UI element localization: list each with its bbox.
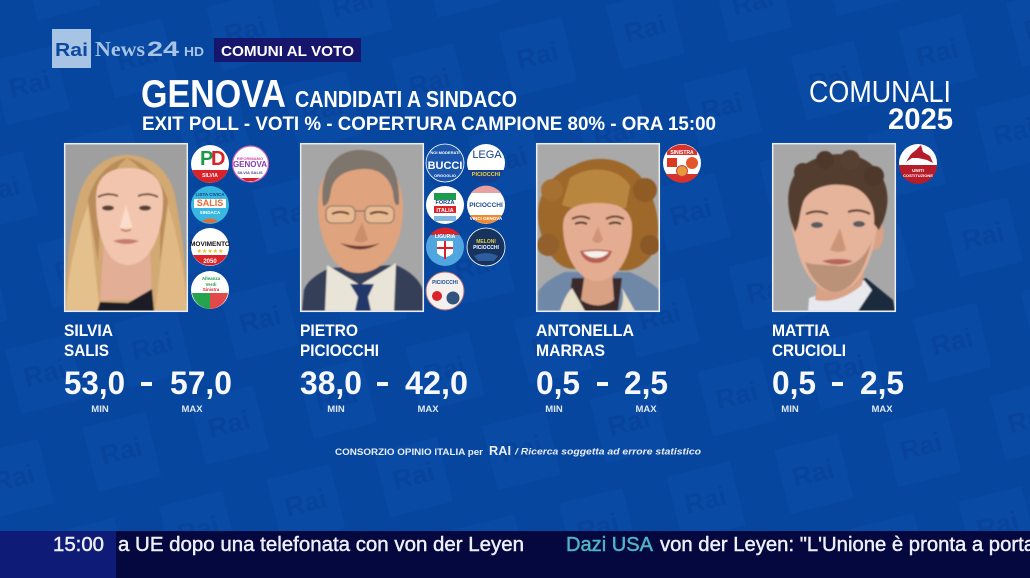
- logo: Sinistra Alternativa: [663, 144, 701, 183]
- logo: Movimento 5 Stelle: ★★★★★: [197, 248, 223, 255]
- candidate name: [300, 321, 379, 360]
- candidate name: [64, 321, 113, 360]
- logo: Forza Italia: FORZA: [436, 200, 454, 206]
- candidate name: [772, 321, 846, 360]
- logo: Uniti per la Costituzione: COSTITUZIONE: [903, 173, 933, 178]
- candidate name: MARRAS: [536, 341, 605, 360]
- logo: Rai News 24 HD: 24: [147, 38, 179, 61]
- logo: Uniti per la Costituzione: UNITI: [912, 168, 924, 173]
- logo: Lista civica Salis: [191, 186, 229, 224]
- logo: PD: [191, 145, 229, 183]
- logo: Genova: RIFORMIAMO: [237, 156, 263, 161]
- logo: Sinistra Alternativa: SINISTRA: [670, 150, 694, 156]
- vote range: MAX: [871, 404, 893, 415]
- vote range: [536, 365, 668, 415]
- vote range: 38,0: [300, 365, 362, 401]
- logo: Meloni: MELONI: [476, 239, 496, 245]
- logo: Movimento 5 Stelle: MOVIMENTO: [190, 241, 230, 248]
- logo: Meloni: PICIOCCHI: [473, 245, 500, 251]
- candidate name: [536, 321, 634, 360]
- news ticker: von der Leyen: "L'Unione è pronta a porta: [660, 534, 1030, 556]
- logo: Lista civica Salis: LISTA CIVICA: [196, 192, 225, 197]
- logo: Liguria UDC: LIGURIA: [435, 234, 456, 240]
- party logos: Salis coalition: [190, 145, 268, 309]
- portrait: Silvia Salis: [64, 143, 188, 312]
- news ticker: a UE dopo una telefonata con von der Leyen: [118, 534, 524, 556]
- title: GENOVA: [141, 73, 286, 116]
- news ticker: Dazi USA: [566, 534, 654, 556]
- party logos: Piciocchi coalition: [426, 144, 505, 310]
- vote range: MIN: [781, 404, 799, 415]
- title: [141, 73, 517, 116]
- candidate name: ANTONELLA: [536, 321, 634, 340]
- subtitle: EXIT POLL - VOTI % - COPERTURA CAMPIONE 80% - ORA 15:00: [142, 114, 716, 135]
- vote range: 2,5: [860, 365, 904, 401]
- vote range: MAX: [635, 404, 657, 415]
- election label: Comunali 2025: 2025: [888, 103, 953, 136]
- logo: Meloni: [467, 228, 505, 266]
- vote range: 42,0: [405, 365, 468, 401]
- source note: RAI: [489, 444, 511, 458]
- logo: Forza Italia: [426, 186, 464, 224]
- logo: Lega: LEGA: [472, 149, 502, 161]
- candidate name: MATTIA: [772, 321, 830, 340]
- logo: Verdi Sinistra: Sinistra: [203, 287, 220, 292]
- logo: Bucci: [426, 144, 464, 182]
- logo: PD: P: [200, 148, 213, 170]
- vote range: MIN: [327, 404, 345, 415]
- panel: Pietro Piciocchi: [300, 143, 505, 415]
- vote range: MIN: [545, 404, 563, 415]
- logo: Rai News 24 HD: HD: [184, 45, 204, 59]
- vote range: 57,0: [170, 365, 232, 401]
- candidate name: CRUCIOLI: [772, 341, 846, 360]
- source note: / Ricerca soggetta ad errore statistico: [514, 446, 701, 458]
- candidate name: PIETRO: [300, 321, 358, 340]
- vote range: [300, 365, 468, 415]
- news ticker: 15:00: [53, 534, 104, 556]
- portrait: Pietro Piciocchi: [300, 143, 424, 312]
- vote range: [772, 365, 904, 415]
- section tag: Comuni al voto: [214, 38, 361, 62]
- logo: Genova: [232, 146, 268, 182]
- logo: Verdi Sinistra: Alleanza: [202, 276, 221, 281]
- logo: Verdi Sinistra: Verdi: [205, 282, 217, 287]
- logo: Rai News 24 HD: [52, 29, 204, 68]
- source note: CONSORZIO OPINIO ITALIA per: [335, 447, 483, 458]
- logo: Rai News 24 HD: Rai: [55, 39, 88, 60]
- logo: Uniti per la Costituzione: [899, 144, 937, 184]
- logo: Piciocchi centro: PICIOCCHI: [432, 280, 459, 286]
- panel: Silvia Salis: [64, 143, 268, 415]
- vote range: [64, 365, 232, 415]
- vote range: 53,0: [64, 365, 125, 401]
- logo: Forza Italia: ITALIA: [436, 208, 454, 214]
- election label: Comunali 2025: [809, 74, 953, 136]
- logo: Liguria UDC: [426, 228, 464, 266]
- vote range: MAX: [181, 404, 203, 415]
- source note: [335, 444, 701, 458]
- logo: Genova: GENOVA: [233, 160, 267, 169]
- portrait: Mattia Crucioli: [772, 143, 896, 312]
- vote range: 0,5: [772, 365, 816, 401]
- vote range: MIN: [91, 404, 109, 415]
- candidate name: SALIS: [64, 341, 109, 360]
- logo: PD: D: [211, 148, 225, 170]
- logo: Bucci: NOI MODERATI: [430, 150, 460, 155]
- logo: Movimento 5 Stelle: 2050: [203, 259, 217, 265]
- logo: Genova: SILVIA SALIS: [237, 170, 263, 175]
- title: CANDIDATI A SINDACO: [295, 86, 517, 112]
- logo: Lista civica Salis: SINDACA: [200, 210, 221, 215]
- election label: Comunali 2025: COMUNALI: [809, 74, 951, 109]
- logo: Lista civica Salis: SALIS: [197, 198, 223, 208]
- panel: Antonella Marras: [536, 143, 701, 415]
- candidate name: SILVIA: [64, 321, 113, 340]
- vote range: 0,5: [536, 365, 580, 401]
- candidate name: PICIOCCHI: [300, 341, 379, 360]
- vote range: MAX: [417, 404, 439, 415]
- logo: Piciocchi civica: PICIOCCHI: [469, 202, 503, 209]
- section tag: Comuni al voto: COMUNI AL VOTO: [221, 43, 354, 60]
- logo: Piciocchi civica: [467, 186, 505, 224]
- vote range: 2,5: [624, 365, 668, 401]
- logo: Bucci: BUCCI: [428, 160, 462, 172]
- logo: Bucci: ORGOGLIO: [434, 173, 456, 178]
- logo: Lega: [467, 144, 505, 183]
- panel: Mattia Crucioli: [772, 143, 937, 415]
- portrait: Antonella Marras: [536, 143, 660, 312]
- logo: Verdi Sinistra: [191, 271, 229, 309]
- logo: PD: SILVIA: [202, 173, 218, 179]
- logo: Piciocchi centro: [426, 272, 464, 310]
- logo: Rai News 24 HD: News: [95, 37, 145, 61]
- logo: Piciocchi civica: VINCI GENOVA: [470, 216, 503, 221]
- news ticker: [0, 531, 1030, 578]
- logo: Lega: PICIOCCHI: [472, 172, 501, 178]
- logo: Movimento 5 Stelle: [190, 228, 230, 266]
